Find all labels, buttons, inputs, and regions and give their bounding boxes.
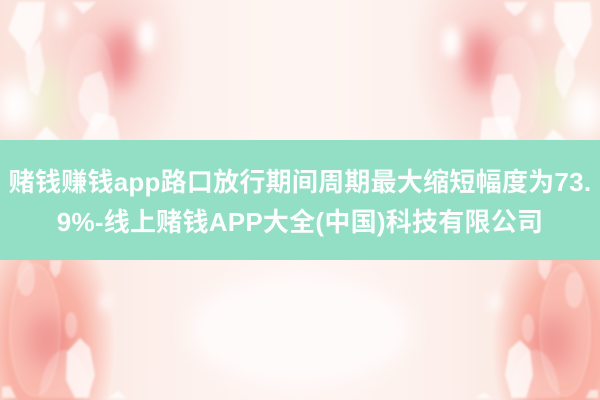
title text: 赌钱赚钱app路口放行期间周期最大缩短幅度为73. [9,167,591,197]
teal title band [0,140,600,260]
title text [9,167,591,237]
title text: 9%-线上赌钱APP大全(中国)科技有限公司 [57,207,543,237]
